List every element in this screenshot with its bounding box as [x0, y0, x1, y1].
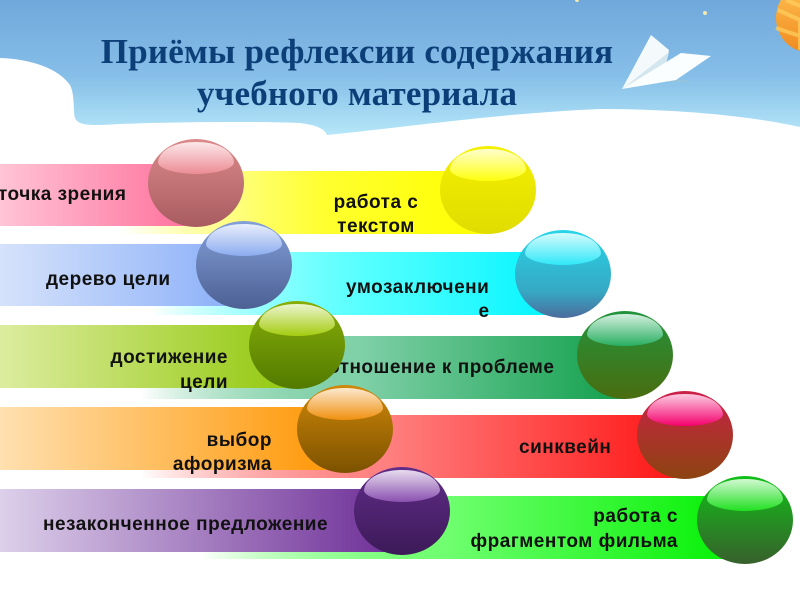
row 1: точка зрения / работа с текстом: работа с — [334, 192, 418, 213]
row 3: достижение цели / отношение к проблеме: отношение к проблеме — [328, 357, 554, 378]
row 1: точка зрения / работа с текстом: точка зрения — [0, 184, 126, 205]
row 2: дерево цели / умозаключение: е — [478, 301, 490, 322]
sky background — [0, 0, 800, 145]
row 4: выбор афоризма / синквейн: выбор — [207, 430, 272, 451]
icon: paper plane — [622, 35, 711, 89]
row 5: незаконченное предложение / работа с фрагментом фильма — [0, 467, 793, 564]
row 1: точка зрения / работа с текстом: текстом — [337, 216, 415, 237]
row 2: дерево цели / умозаключение: дерево цели — [46, 269, 171, 290]
row 5: незаконченное предложение / работа с фрагментом фильма: фрагментом фильма — [471, 531, 678, 552]
row 5: незаконченное предложение / работа с фрагментом фильма: незаконченное предложение — [43, 514, 328, 535]
row 5: незаконченное предложение / работа с фрагментом фильма: работа с — [593, 506, 678, 527]
row 4: выбор афоризма / синквейн: афоризма — [173, 454, 272, 475]
row 3: достижение цели / отношение к проблеме — [0, 301, 673, 399]
title: учебного материала — [197, 74, 517, 113]
row 4: выбор афоризма / синквейн — [0, 385, 733, 479]
row 4: выбор афоризма / синквейн: синквейн — [519, 437, 611, 458]
row 2: дерево цели / умозаключение — [0, 221, 611, 322]
icon: orange balloon — [776, 0, 800, 52]
row 1: точка зрения / работа с текстом — [0, 139, 536, 237]
row 3: достижение цели / отношение к проблеме: достижение — [111, 347, 228, 368]
row 2: дерево цели / умозаключение: умозаключени — [346, 277, 489, 298]
row 3: достижение цели / отношение к проблеме: цели — [180, 372, 228, 393]
title: Приёмы рефлексии содержания — [101, 32, 613, 71]
title — [101, 32, 613, 113]
